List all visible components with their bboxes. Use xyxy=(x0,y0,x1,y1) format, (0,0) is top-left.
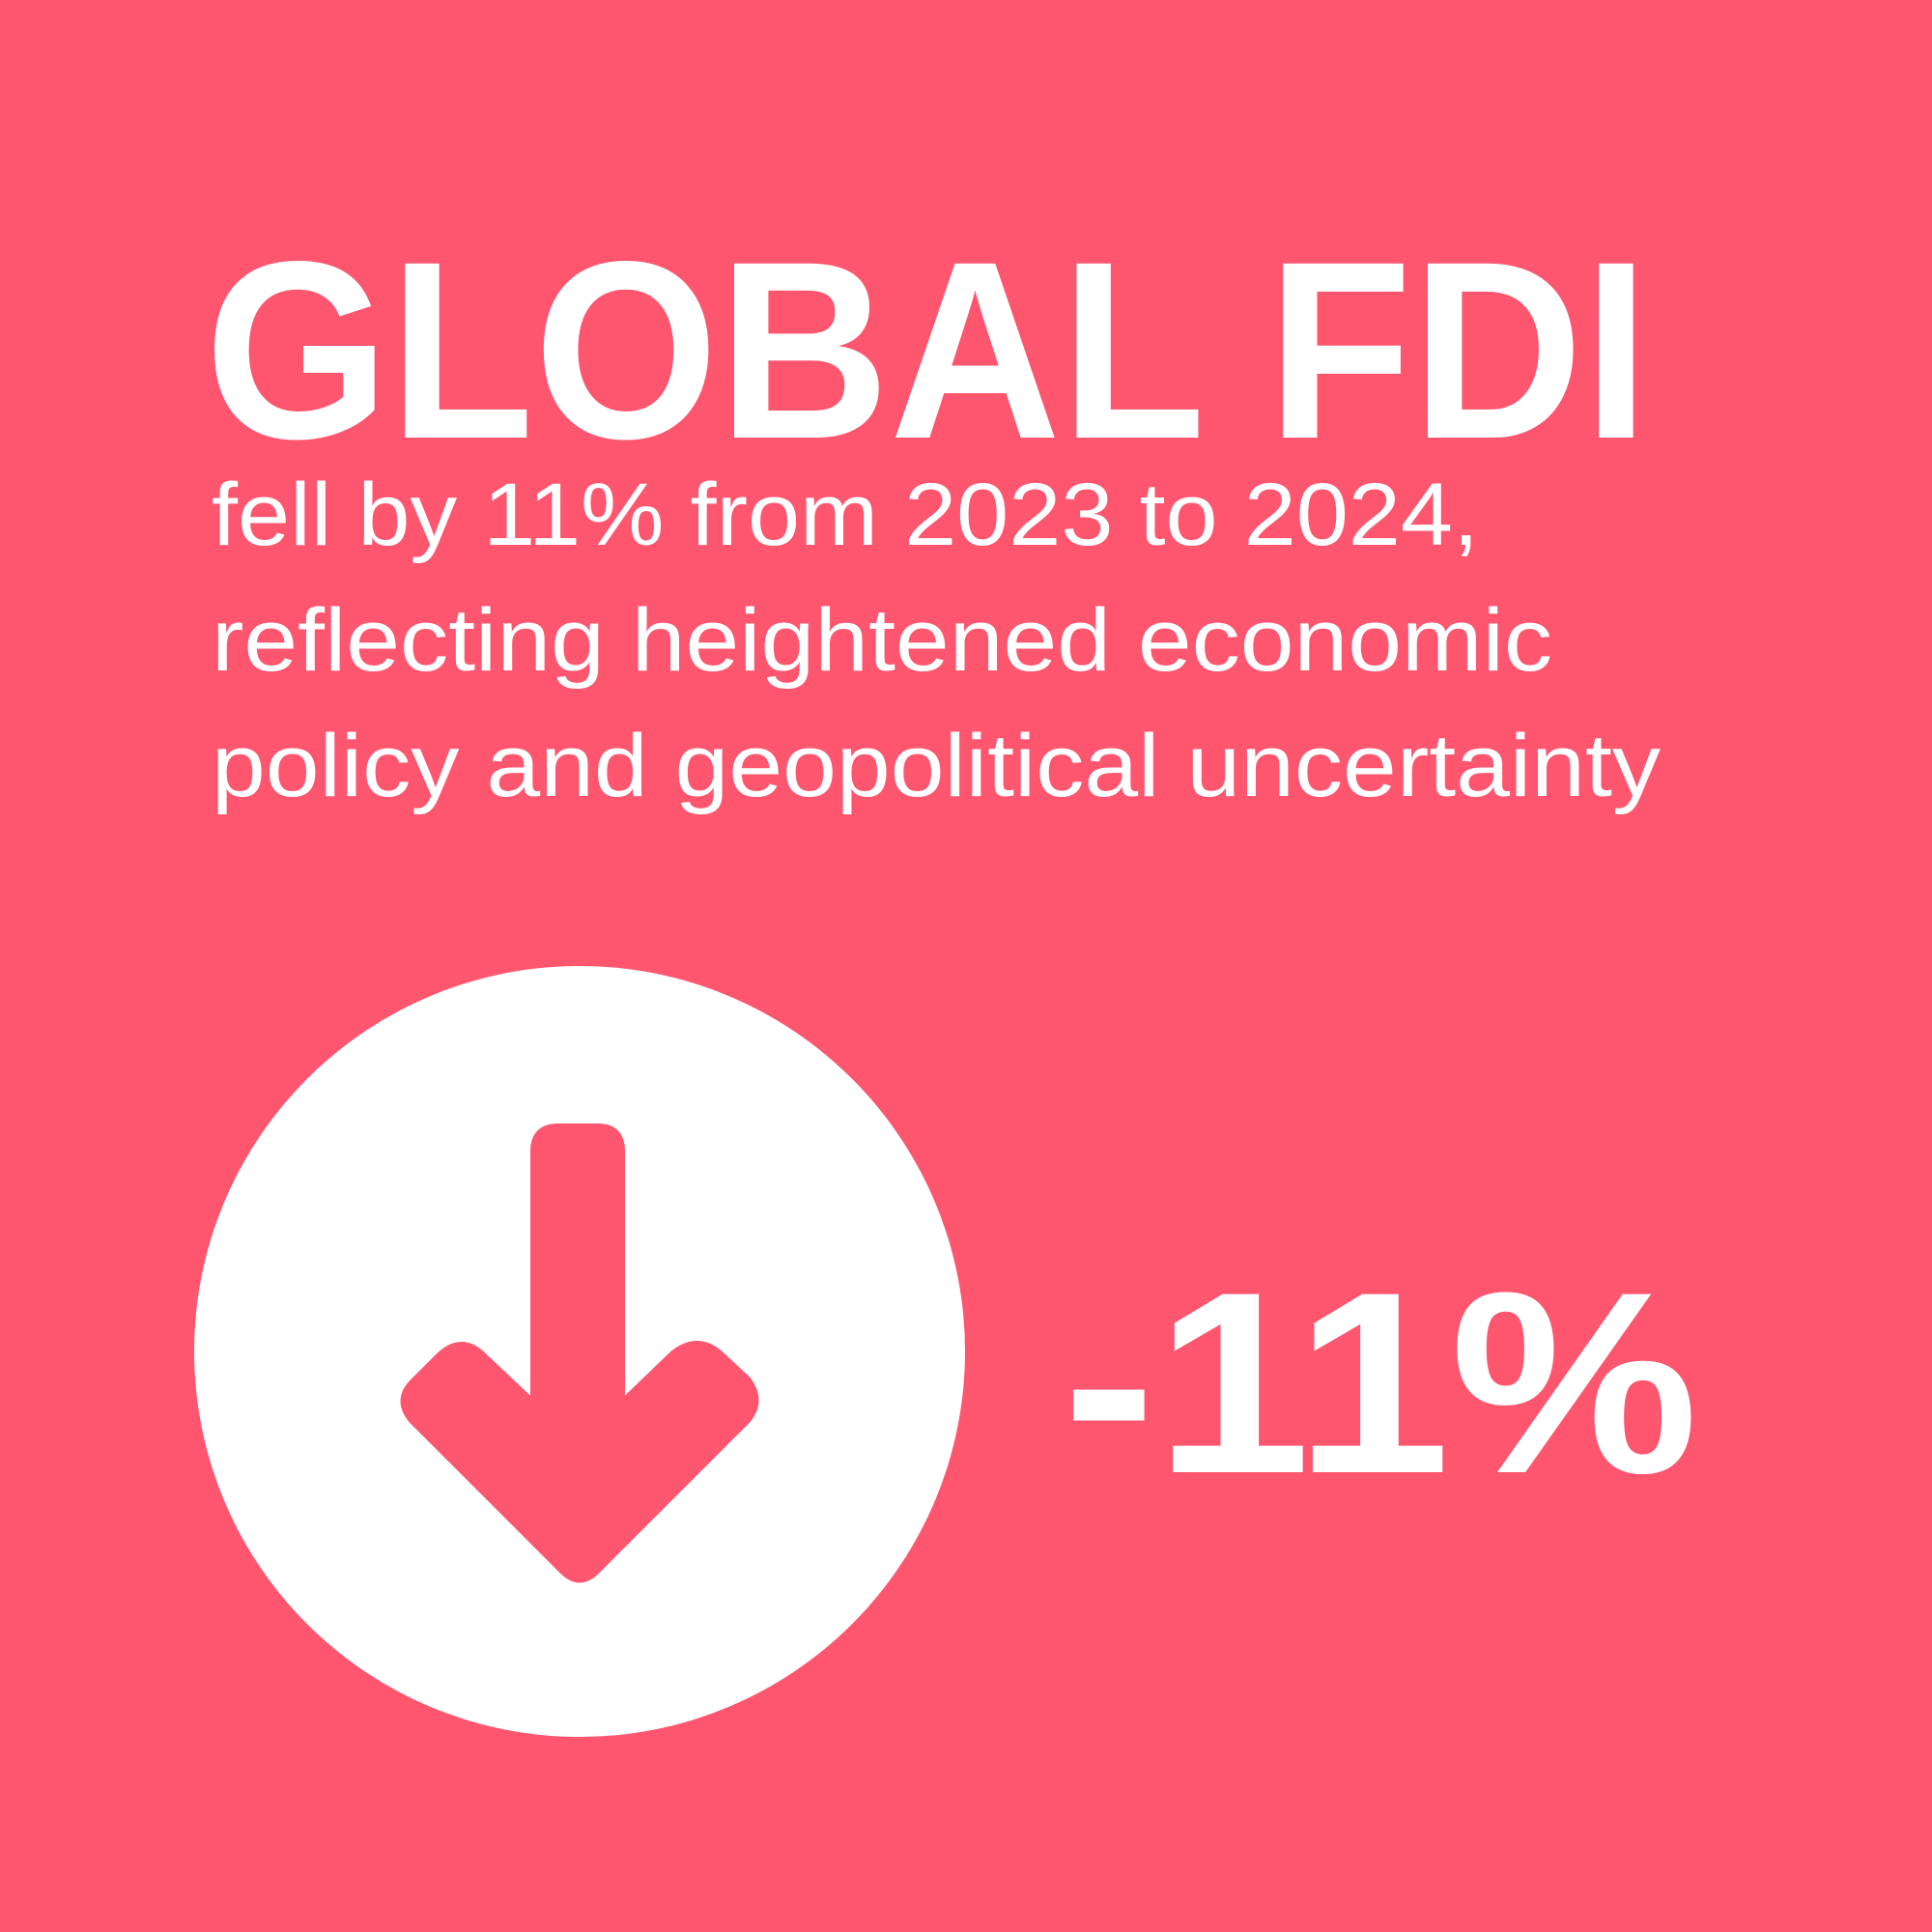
subtitle text block xyxy=(212,466,1661,815)
subtitle text block: fell by 11% from 2023 to 2024, xyxy=(212,466,1479,564)
stat: -11%: -11% xyxy=(1063,1237,1698,1527)
subtitle text block: policy and geopolitical uncertainty xyxy=(212,717,1661,815)
subtitle text block: reflecting heightened economic xyxy=(212,591,1552,690)
icon: down arrow in circle xyxy=(194,966,965,1737)
title: GLOBAL FDI xyxy=(205,209,1649,492)
